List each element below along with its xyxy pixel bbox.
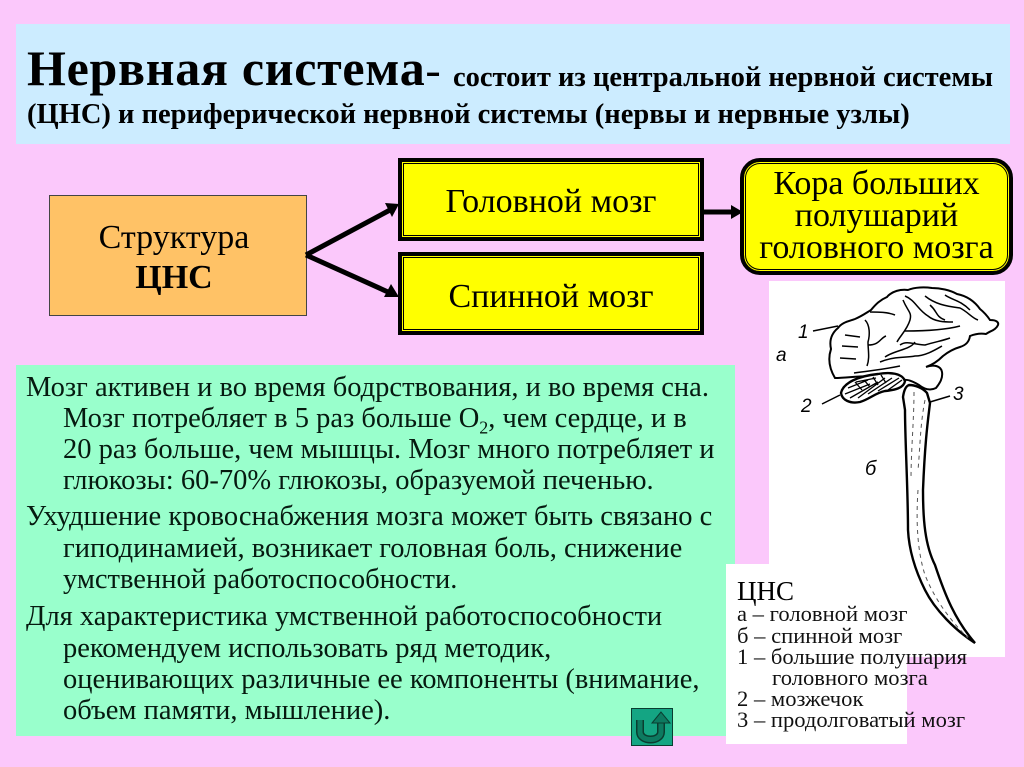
label: spinal cord: Спинной мозг — [448, 278, 654, 315]
box: brain — [398, 158, 704, 241]
paragraph 2 — [26, 501, 712, 595]
legend text: 1 – большие полушария — [737, 644, 967, 669]
brain outline — [829, 287, 998, 389]
callout labels: а — [776, 345, 787, 366]
legend title: ЦНС — [737, 576, 794, 606]
callout labels — [776, 322, 964, 480]
box: cerebral cortex — [740, 158, 1013, 275]
callout labels: 2 — [800, 396, 812, 417]
callout lines — [813, 326, 950, 404]
paragraph 1 — [26, 372, 715, 496]
box: spinal cord — [398, 252, 704, 335]
paragraph 1: 20 раз больше, чем мышцы. Мозг много потребляет и — [63, 434, 715, 465]
legend text: б – спинной мозг — [737, 623, 902, 648]
box: cerebral cortex: головного мозга — [759, 229, 994, 266]
paragraph 3 — [26, 601, 700, 726]
paragraph 3: объем памяти, мышление). — [63, 695, 390, 726]
paragraph 1: глюкозы: 60-70% глюкозы, образуемой печенью. — [63, 465, 654, 496]
spinal cord — [903, 385, 975, 643]
box: structure of CNS — [49, 195, 307, 316]
box: cerebral cortex: полушарий — [795, 197, 958, 234]
text panel: brain facts — [16, 365, 735, 736]
paragraph 3: Для характеристика умственной работоспособности — [26, 601, 662, 632]
paragraph 3: рекомендуем использовать ряд методик, — [63, 633, 551, 664]
legend text: 2 – мозжечок — [737, 686, 863, 711]
image: brain and spinal cord diagram — [769, 281, 1005, 657]
callout labels: 1 — [798, 322, 809, 343]
box: structure of CNS: Структура — [99, 219, 249, 256]
label: brain: Головной мозг — [445, 183, 657, 220]
main heading: Нервная система- — [27, 40, 441, 96]
heading subtitle line 1: состоит из центральной нервной системы — [453, 62, 993, 93]
callout labels: 3 — [953, 384, 964, 405]
paragraph 1: Мозг потребляет в 5 раз больше О2, чем сердце, и в — [63, 403, 687, 438]
box: cerebral cortex: Кора больших — [773, 165, 980, 202]
paragraph 2: Ухудшение кровоснабжения мозга может быть связано с — [26, 501, 712, 532]
cerebellum — [841, 373, 905, 403]
spinal cord shading — [911, 392, 968, 638]
paragraph 2: умственной работоспособности. — [63, 564, 457, 595]
legend text: а – головной мозг — [737, 601, 907, 626]
paragraph 3: оценивающих различные ее компоненты (внимание, — [63, 664, 700, 695]
legend text: головного мозга — [772, 665, 928, 690]
title panel — [16, 24, 1010, 144]
icon: return button — [631, 708, 673, 746]
paragraph 1: Мозг активен и во время бодрствования, и во время сна. — [26, 372, 709, 403]
legend text — [737, 576, 967, 732]
box: structure of CNS: ЦНС — [135, 259, 213, 296]
legend text: 3 – продолговатый мозг — [737, 707, 965, 732]
callout labels: б — [865, 458, 877, 480]
paragraph 2: гиподинамией, возникает головная боль, снижение — [63, 533, 682, 564]
brain folds — [840, 295, 978, 373]
heading subtitle line 2: (ЦНС) и периферической нервной системы (нервы и нервные узлы) — [27, 99, 910, 130]
legend panel — [726, 564, 907, 744]
